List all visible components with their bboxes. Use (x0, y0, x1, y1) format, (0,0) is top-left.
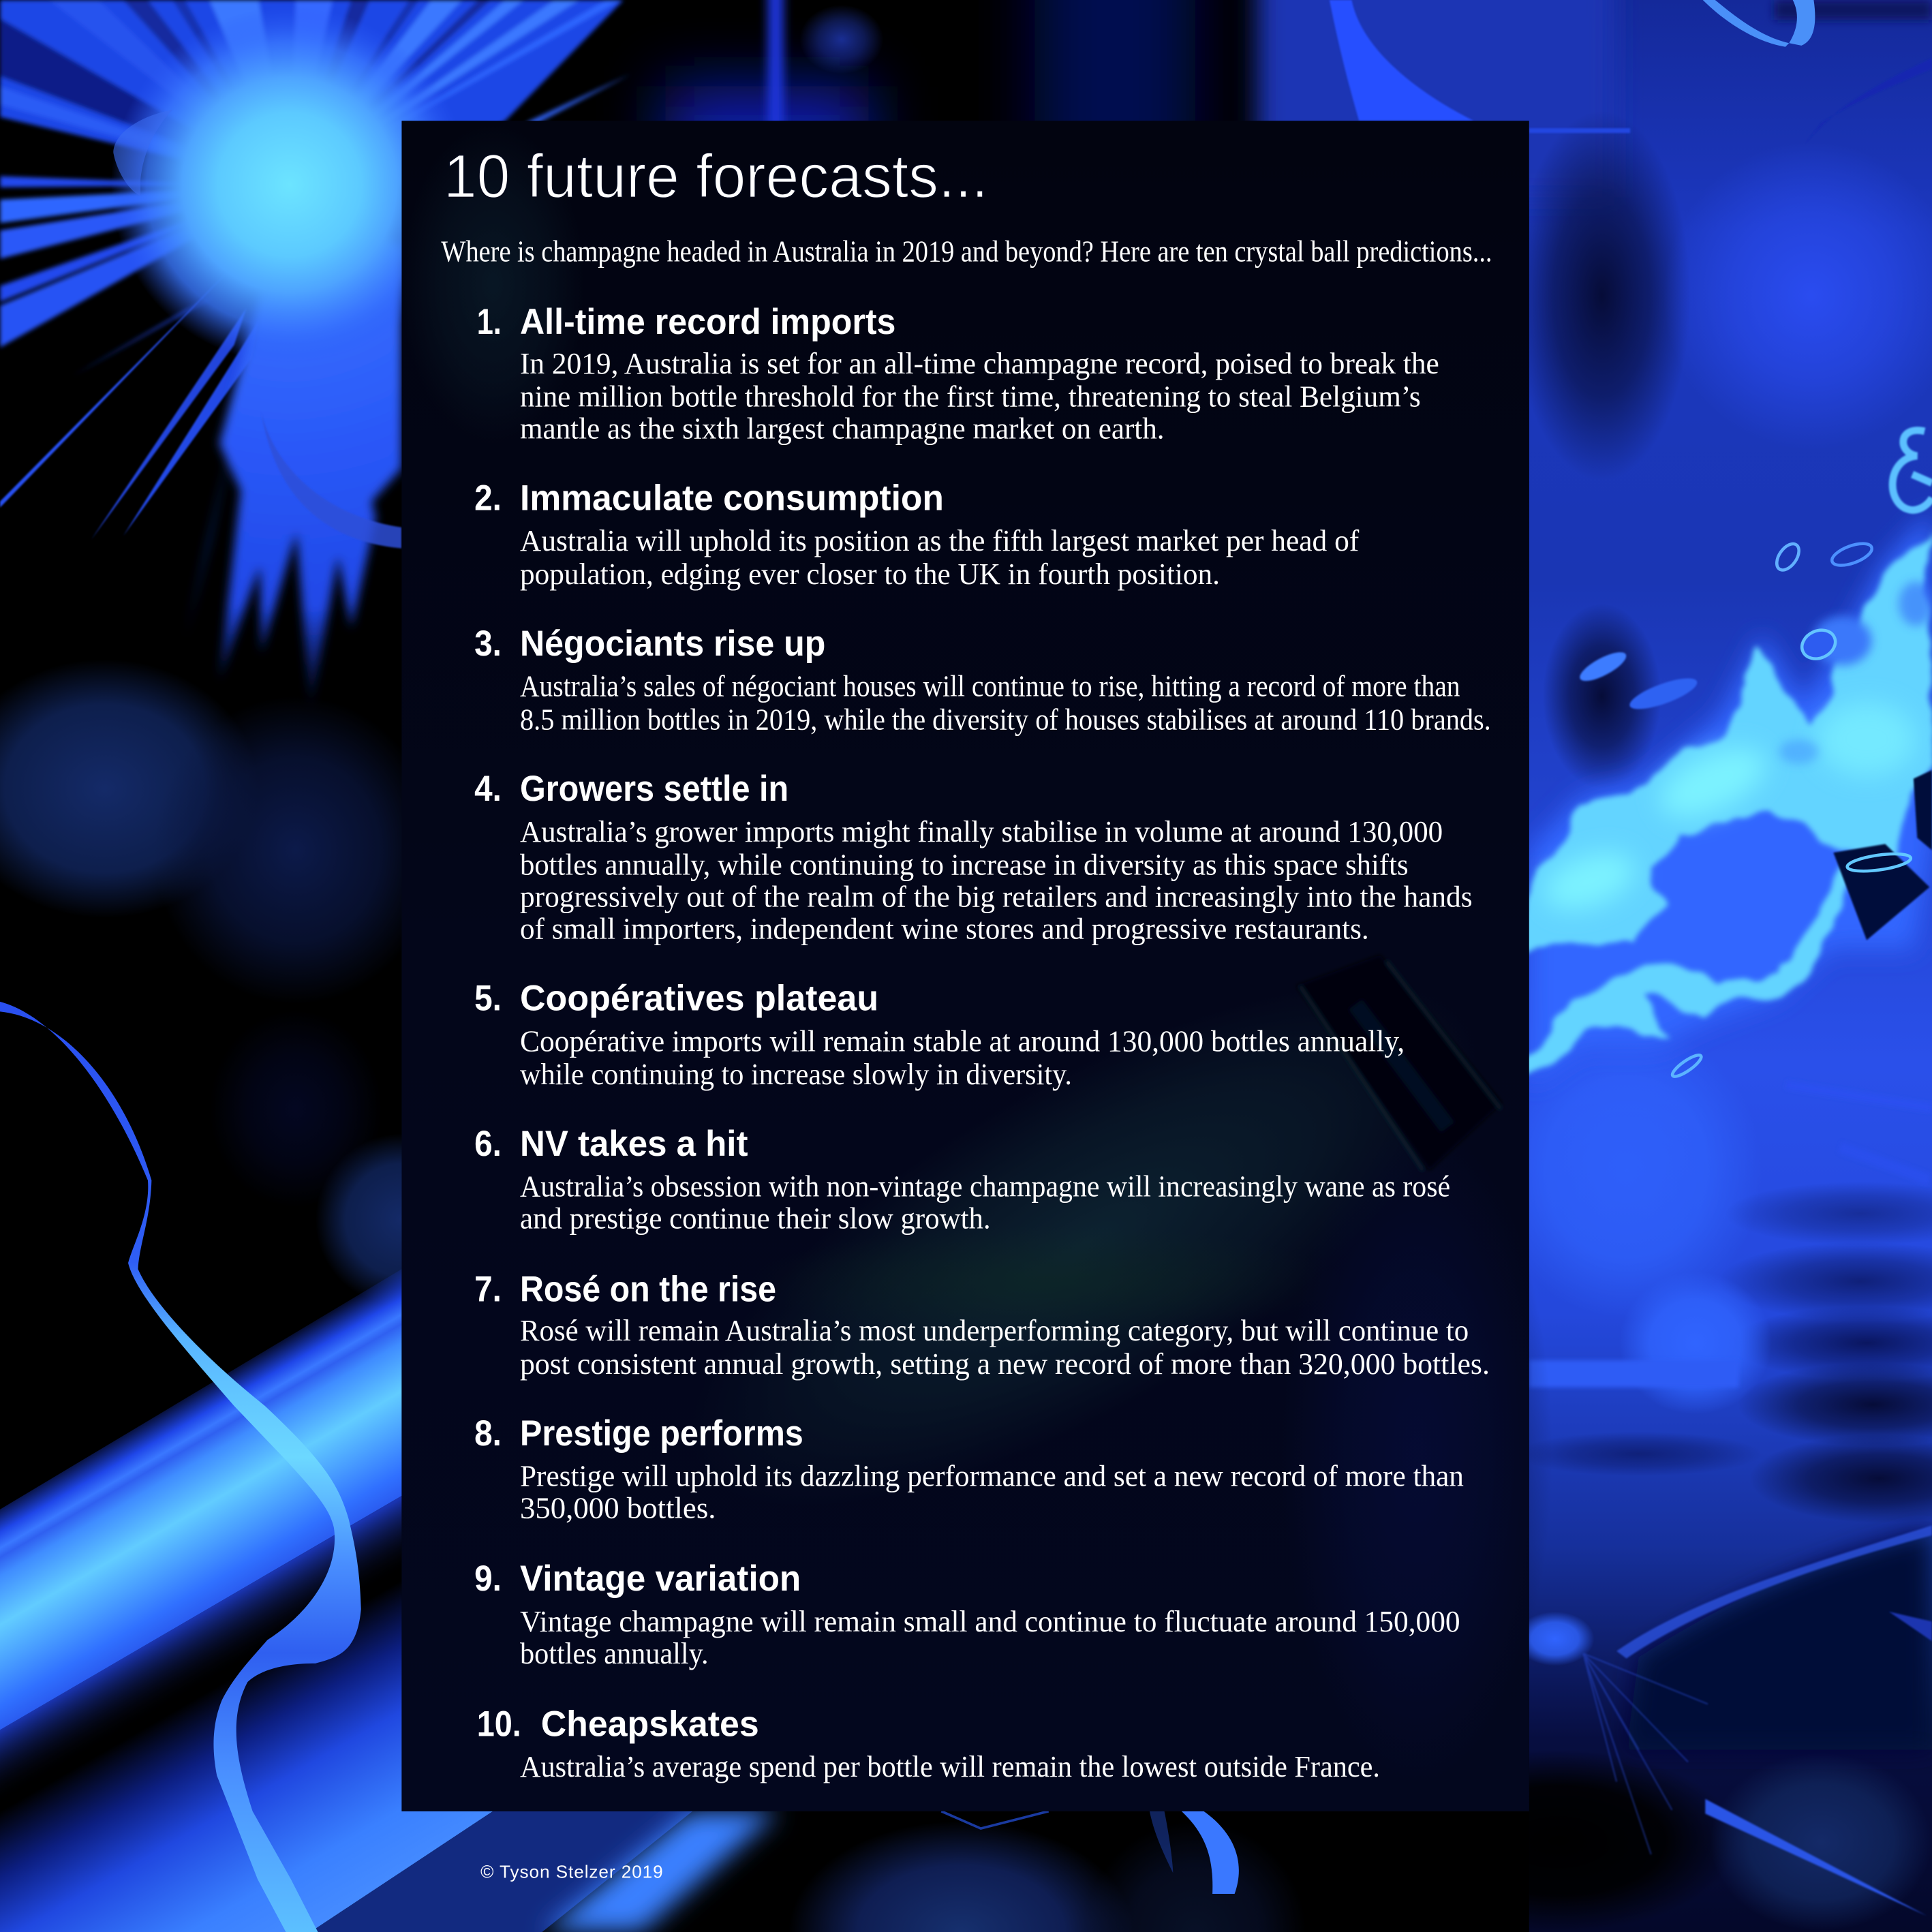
forecast 9: bottles annually. (520, 1637, 709, 1670)
forecast 4: of small importers, independent wine stores and progressive restaurants. (520, 913, 1369, 946)
forecast 1: In 2019, Australia is set for an all-time champagne record, poised to break the (520, 347, 1439, 380)
dark bottle lip (1833, 770, 1932, 940)
panel: forecasts list (401, 121, 1552, 1811)
smoke plume (1529, 511, 1932, 1084)
forecast 9: Vintage champagne will remain small and continue to fluctuate around 150,000 (520, 1605, 1460, 1638)
ribbon left (0, 1002, 361, 1932)
forecast 7: Rosé on the rise (520, 1270, 776, 1309)
light beams lower left (0, 1269, 1306, 1932)
forecast 10: Cheapskates (541, 1705, 759, 1745)
forecast 10: Australia’s average spend per bottle will remain the lowest outside France. (520, 1750, 1380, 1783)
forecast 8: Prestige performs (520, 1414, 803, 1454)
forecast 9: 9. (474, 1559, 502, 1599)
forecast 1 (477, 303, 1439, 446)
forecast 1: mantle as the sixth largest champagne market on earth. (520, 412, 1165, 446)
forecast 4: 4. (474, 769, 502, 809)
forecast 8: 8. (474, 1414, 502, 1454)
forecast 5: Coopérative imports will remain stable at around 130,000 bottles annually, (520, 1024, 1405, 1058)
forecast 6 (474, 1124, 1450, 1236)
title: 10 future forecasts... (444, 142, 988, 211)
forecast 4: Growers settle in (520, 769, 788, 809)
top strip glows (665, 0, 1614, 221)
forecast 7 (474, 1270, 1490, 1381)
right field tones (1380, 0, 1932, 1932)
forecast 1: nine million bottle threshold for the first time, threatening to steal Belgium’s (520, 380, 1421, 414)
forecast 2: Immaculate consumption (520, 479, 944, 519)
streaks lower right (1583, 1525, 1932, 1916)
forecast 6: and prestige continue their slow growth. (520, 1202, 991, 1236)
forecast 5 (474, 979, 1405, 1091)
forecast 2: population, edging ever closer to the UK in fourth position. (520, 557, 1220, 591)
forecast 1: All-time record imports (520, 303, 895, 342)
ribbon bottom (1150, 1811, 1239, 1894)
forecast 3: 3. (474, 624, 502, 664)
forecast 1: 1. (477, 303, 502, 342)
ribbons top right (1703, 0, 1932, 145)
forecast 3 (474, 624, 1491, 736)
copyright: © Tyson Stelzer 2019 (480, 1861, 663, 1882)
starburst (0, 0, 631, 709)
forecast 8: 350,000 bottles. (520, 1491, 716, 1524)
forecast 8 (474, 1414, 1464, 1524)
forecast 6: NV takes a hit (520, 1124, 748, 1164)
forecast 7: 7. (474, 1270, 502, 1309)
forecast 8: Prestige will uphold its dazzling performance and set a new record of more than (520, 1459, 1464, 1492)
forecast 5: Coopératives plateau (520, 979, 878, 1019)
forecast 5: 5. (474, 979, 502, 1019)
forecast 3: Australia’s sales of négociant houses will continue to rise, hitting a record of more than (520, 670, 1460, 703)
forecast 4: progressively out of the realm of the big retailers and increasingly into the hands (520, 880, 1473, 914)
forecast 7: post consistent annual growth, setting a new record of more than 320,000 bottles. (520, 1347, 1490, 1381)
left side dim blobs (0, 659, 488, 1306)
forecast 3: Négociants rise up (520, 624, 825, 664)
forecast 2 (474, 479, 1360, 591)
intro text: Where is champagne headed in Australia in 2019 and beyond? Here are ten crystal ball predictions... (441, 234, 1492, 268)
forecast 6: 6. (474, 1124, 502, 1164)
forecast 9 (474, 1559, 1460, 1670)
forecast 4: Australia’s grower imports might finally stabilise in volume at around 130,000 (520, 815, 1443, 848)
forecast 10 (477, 1705, 1380, 1783)
forecast 3: 8.5 million bottles in 2019, while the diversity of houses stabilises at around 110 brands. (520, 703, 1491, 736)
forecast 2: Australia will uphold its position as the fifth largest market per head of (520, 524, 1360, 557)
forecast 2: 2. (474, 479, 502, 519)
forecast 4 (474, 769, 1473, 946)
forecast 9: Vintage variation (520, 1559, 801, 1599)
forecast 4: bottles annually, while continuing to increase in diversity as this space shifts (520, 848, 1409, 882)
forecast 7: Rosé will remain Australia’s most underperforming category, but will continue to (520, 1314, 1469, 1347)
droplets (1576, 431, 1932, 1079)
forecast 10: 10. (477, 1705, 521, 1745)
forecast 6: Australia’s obsession with non-vintage champagne will increasingly wane as rosé (520, 1170, 1450, 1203)
forecast 5: while continuing to increase slowly in diversity. (520, 1058, 1072, 1091)
